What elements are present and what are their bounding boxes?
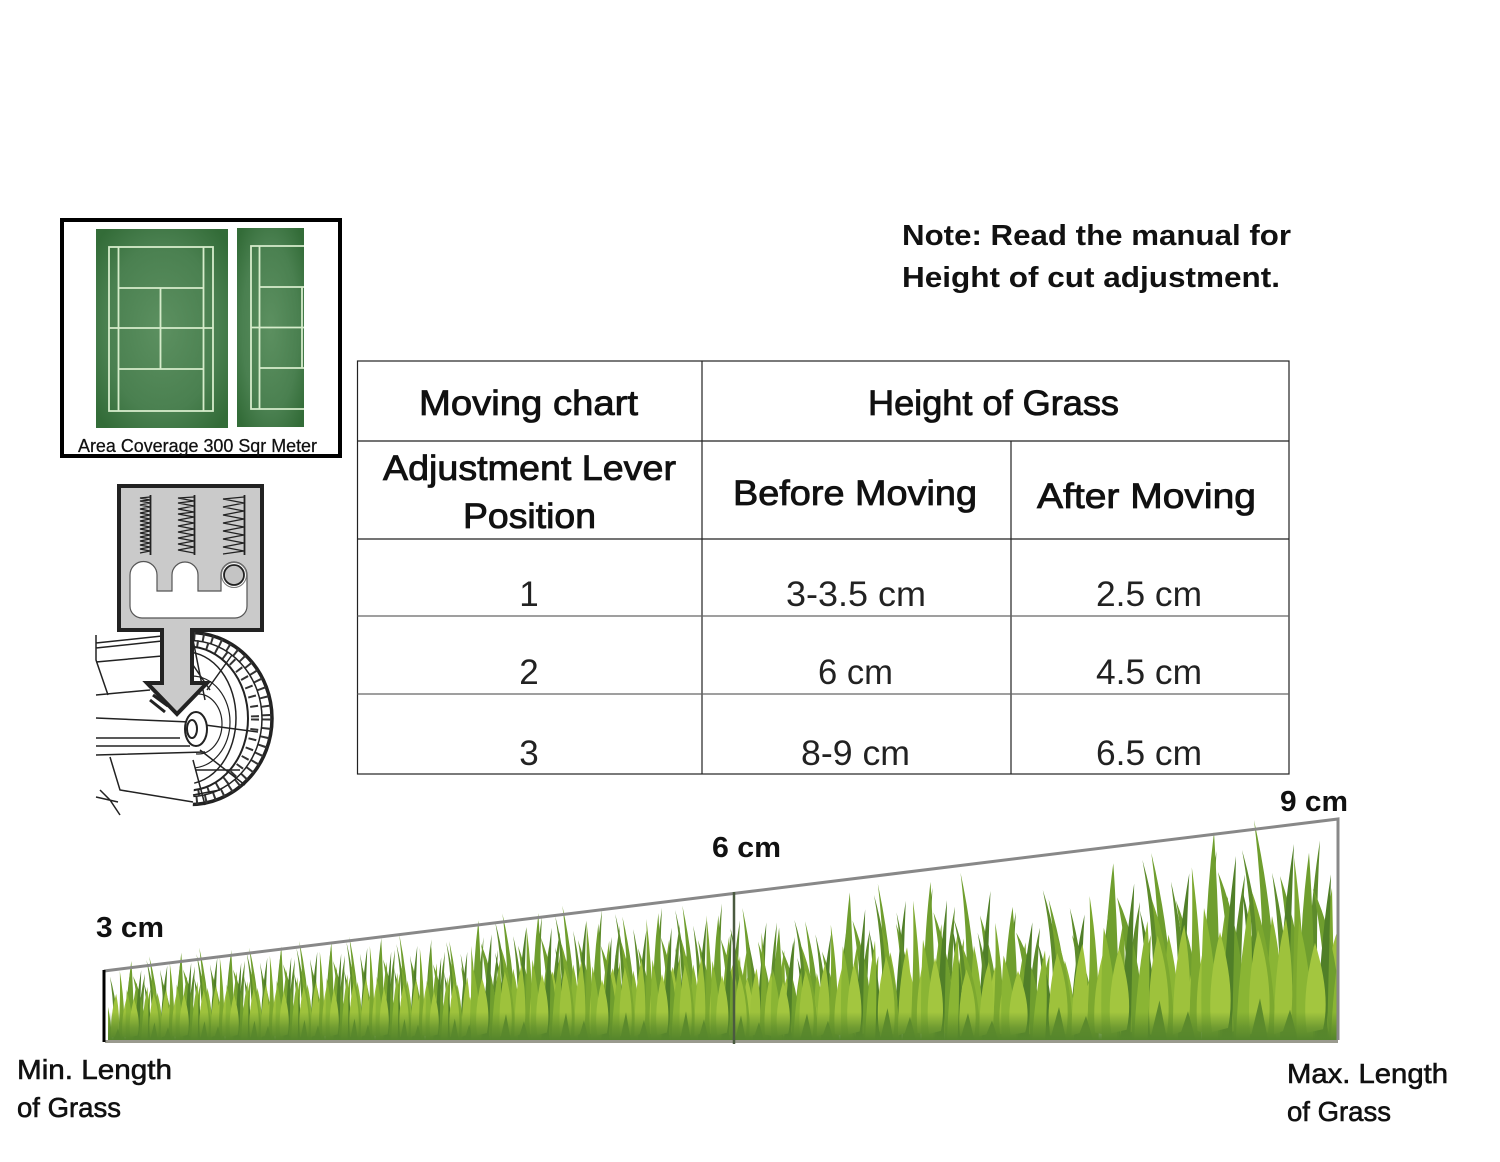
table row 2 bbox=[519, 653, 1202, 692]
label: min length: of Grass bbox=[17, 1092, 121, 1123]
table row 1 bbox=[519, 575, 1202, 614]
label: max length: Max. Length bbox=[1287, 1058, 1448, 1089]
area coverage caption: Area Coverage 300 Sqr Meter bbox=[78, 436, 317, 456]
icon: tennis court full bbox=[96, 229, 228, 428]
mower body covering left of wheel bbox=[90, 628, 198, 818]
table row 1: 1 bbox=[519, 575, 539, 614]
table row 2: 4.5 cm bbox=[1096, 653, 1202, 692]
table header: Position bbox=[463, 497, 596, 536]
label: 3 cm: 3 cm bbox=[96, 912, 164, 944]
table row 2: 2 bbox=[519, 653, 539, 692]
label: max length: of Grass bbox=[1287, 1096, 1391, 1127]
table row 3: 8-9 cm bbox=[801, 734, 910, 773]
icon: tennis court partial bbox=[237, 228, 304, 427]
label: max length bbox=[1287, 1058, 1448, 1127]
table header: Adjustment Lever bbox=[383, 449, 676, 488]
table row 1: 2.5 cm bbox=[1096, 575, 1202, 614]
label: min length bbox=[17, 1054, 172, 1123]
grass height tick marks bbox=[140, 495, 244, 555]
note: Height of cut adjustment. bbox=[902, 262, 1280, 294]
panel: area coverage bbox=[62, 220, 340, 456]
table header: After Moving bbox=[1037, 477, 1256, 516]
slope and measurement lines bbox=[104, 819, 1338, 1044]
table header bbox=[383, 384, 1256, 536]
table row 3 bbox=[519, 734, 1202, 773]
table header: Moving chart bbox=[419, 384, 638, 423]
illustration: mower wheel and axle bbox=[90, 628, 272, 818]
table header: Before Moving bbox=[733, 474, 977, 513]
note bbox=[902, 220, 1291, 294]
icon: height adjustment lever plate and arrow bbox=[119, 486, 262, 714]
table row 2: 6 cm bbox=[818, 653, 893, 692]
table row 3: 6.5 cm bbox=[1096, 734, 1202, 773]
illustration: grass bbox=[96, 820, 1405, 1040]
label: 6 cm: 6 cm bbox=[712, 832, 781, 864]
table: mowing chart bbox=[358, 361, 1289, 774]
lever position indicator bbox=[222, 562, 246, 588]
note: Note: Read the manual for bbox=[902, 220, 1291, 252]
label: min length: Min. Length bbox=[17, 1054, 172, 1085]
lever slots bbox=[130, 562, 247, 618]
grass height diagram bbox=[17, 786, 1448, 1127]
table row 1: 3-3.5 cm bbox=[786, 575, 926, 614]
table row 3: 3 bbox=[519, 734, 539, 773]
label: 9 cm: 9 cm bbox=[1280, 786, 1348, 818]
table header: Height of Grass bbox=[868, 384, 1119, 423]
